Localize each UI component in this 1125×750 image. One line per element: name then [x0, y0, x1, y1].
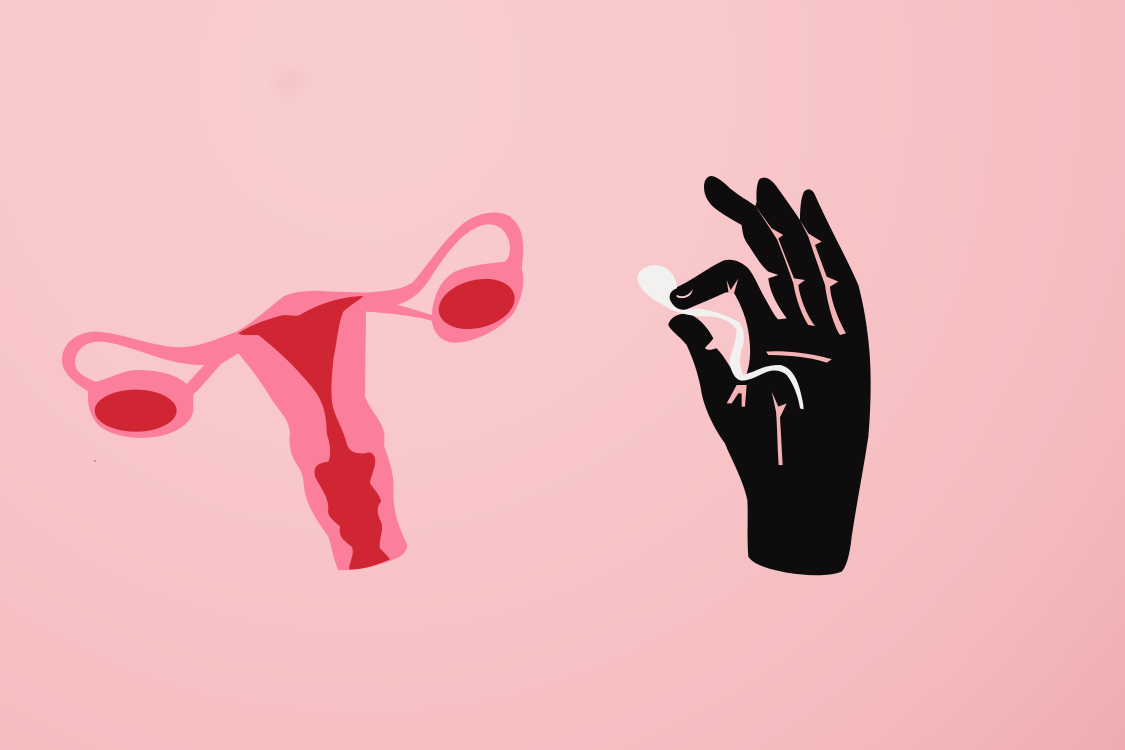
palm and finger crease cut-outs — [727, 206, 846, 465]
illustration: uterus — [62, 212, 523, 570]
uterine cavity and canal — [238, 296, 390, 569]
black hand silhouette — [668, 176, 871, 575]
uterus outer pink shape with fallopian tubes — [62, 212, 523, 570]
sperm: white paper head and tail — [637, 265, 804, 409]
thumbnail crescent — [677, 289, 693, 298]
illustration: hand holding sperm — [637, 176, 871, 575]
right ovary — [433, 271, 520, 337]
left ovary — [95, 390, 177, 432]
